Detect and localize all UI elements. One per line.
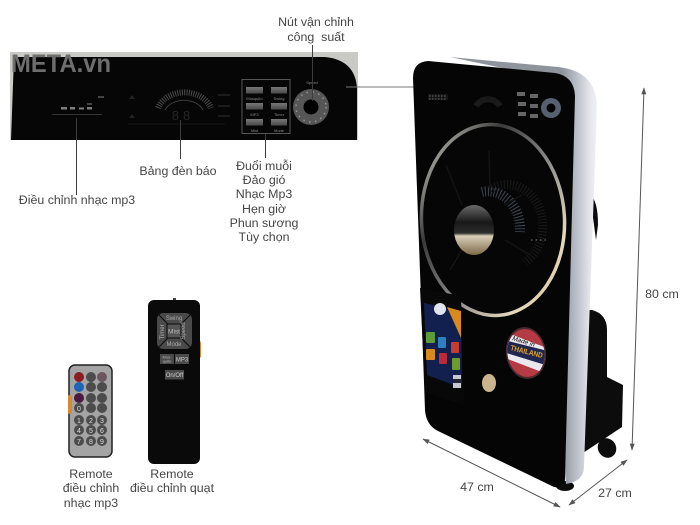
mp3 remote digits: 2 [89,418,93,425]
label: functions list: Đảo gió [243,173,285,187]
remote: mp3 [68,365,112,457]
label: functions list: Tùy chọn [239,230,290,244]
remote: fan [148,298,201,464]
function button box: Swing [274,96,284,101]
function button box: Mist [251,128,259,133]
label: fan remote: điều chỉnh quạt [130,481,215,495]
function button box [242,80,290,134]
label: functions list: Hẹn giờ [242,202,286,216]
label: functions list: Nhạc Mp3 [236,187,292,201]
illustration: fan product [413,57,623,491]
watermark: META.vn [11,50,111,78]
fan rear body and wheels [556,195,623,491]
Thailand sticker [506,327,546,379]
fan remote direction pad: Mode [166,342,182,348]
label: mp3 adjust: Điều chỉnh nhạc mp3 [19,193,135,207]
mp3 remote digits: 5 [89,428,93,435]
fan remote mosquito button: quito [163,358,172,364]
Thailand sticker: THAILAND [510,343,544,360]
mp3 remote digits [77,406,104,446]
black front panel [413,61,575,487]
arrow: depth [569,460,627,505]
mp3 remote digits: 6 [100,428,104,435]
function button box: Timer [274,112,285,117]
label: power knob: công suất [287,30,345,44]
fan remote MP3 button: MP3 [176,358,189,364]
fan blades [446,150,548,270]
label: mp3 remote: nhạc mp3 [64,496,118,510]
label: width: 47 cm [460,480,494,494]
fan remote direction pad: Mist [168,328,180,336]
fan remote on/off button [165,370,184,380]
function button box: Mode [274,128,285,133]
label: mp3 remote: Remote [69,467,113,481]
leader lines [76,45,421,195]
function button box: Mosquito [246,96,263,101]
fan remote direction pad: Swing [166,316,182,322]
mp3 remote digits: 9 [100,439,104,446]
mp3 control buttons [52,96,104,115]
fan remote mosquito button [160,354,174,364]
label: functions list: Phun sương [230,216,298,230]
fan remote direction pad: Timer [160,324,166,340]
chrome oval button [482,374,496,392]
mp3 remote digits: 4 [77,428,81,435]
arrow: height [632,88,644,450]
mp3 remote digits: 3 [100,418,104,425]
mp3 remote buttons [74,372,107,446]
fan grille ring [417,121,569,319]
label: indicator panel: Bảng đèn báo [139,164,217,178]
fan remote direction pad [157,313,192,349]
label: functions list: Đuổi muỗi [236,159,292,173]
top controls on fan [428,92,561,118]
chrome hub [454,205,494,255]
mp3 remote digits: 0 [77,406,81,413]
sticker text: Made in [511,335,536,349]
function button box: MP3 [250,112,259,117]
fan remote mosquito button: Mos- [163,354,172,360]
speed knob [293,80,329,125]
label: height: 80 cm [645,287,679,301]
label: mp3 remote: điều chỉnh [63,481,119,495]
mp3 remote digits: 1 [77,418,81,425]
mp3 remote digits: 7 [77,439,81,446]
arrow: width [423,439,560,507]
mp3 remote digits: 8 [89,439,93,446]
leaflet poster [420,288,464,405]
fan remote direction pad: Speed [181,322,187,340]
indicator display gauge [128,92,230,124]
panel: control panel close-up [10,50,358,140]
label: depth: 27 cm [598,486,632,500]
indicator display gauge: 88 [172,108,194,123]
white side band [450,57,597,484]
fan remote on/off button: On/Off [166,373,184,379]
fan remote MP3 button [175,354,189,364]
label: power knob: Nút vận chỉnh [278,15,354,29]
speed knob: Speed [306,80,318,85]
label: fan remote: Remote [150,467,194,481]
